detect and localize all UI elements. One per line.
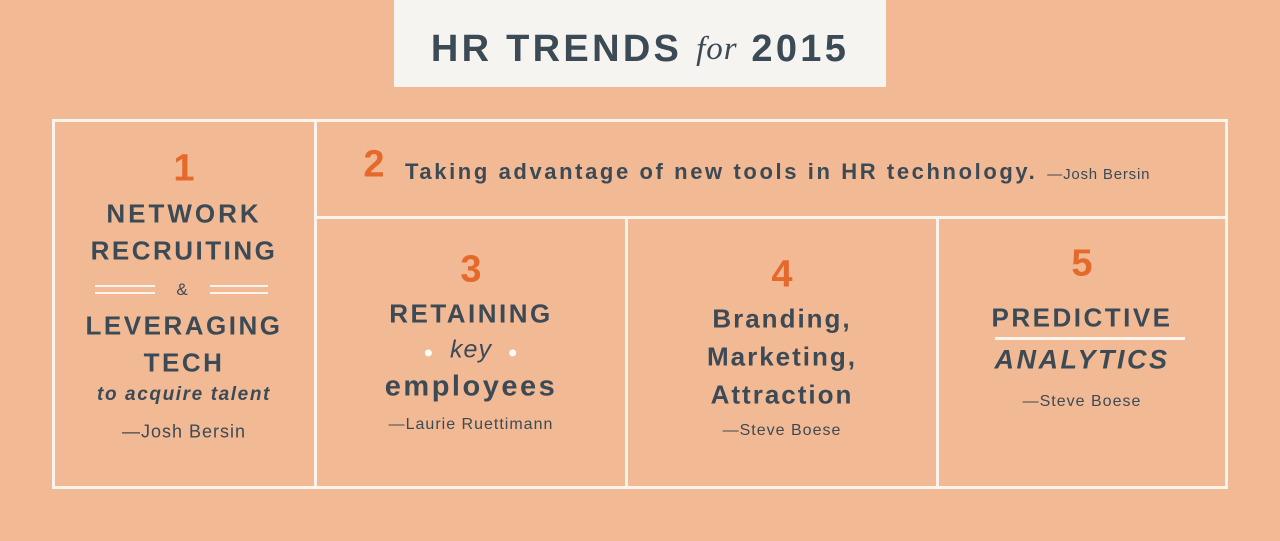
panel 4: Attraction <box>711 380 853 410</box>
title: for <box>696 31 738 67</box>
panel 5: 5 <box>1071 242 1093 284</box>
panel 2: 2 <box>363 144 385 186</box>
panel 4 <box>707 254 857 439</box>
panel 2 <box>363 144 1150 186</box>
panel 5: ANALYTICS <box>994 344 1170 374</box>
panel 3: employees <box>385 370 557 402</box>
panel 2: Taking advantage of new tools in HR technology. —Josh Bersin <box>405 159 1150 184</box>
panel 1: —Josh Bersin <box>122 422 246 442</box>
panel 4: —Steve Boese <box>723 422 841 439</box>
panel 4: 4 <box>771 254 793 296</box>
panel 4: Branding, <box>712 304 852 334</box>
panel 5: PREDICTIVE <box>991 302 1173 332</box>
panel 3: ● key ● <box>423 336 519 364</box>
panel 1: RECRUITING <box>91 236 277 266</box>
panel 5 <box>991 242 1185 410</box>
panel 4: Marketing, <box>707 342 857 372</box>
title <box>394 0 886 87</box>
panel 5: —Steve Boese <box>1023 393 1141 410</box>
panel 3 <box>385 248 557 433</box>
panel 3: RETAINING <box>389 298 553 328</box>
panel 1: TECH <box>144 348 224 378</box>
panel 1: NETWORK <box>106 198 262 228</box>
panel 1 <box>86 148 282 442</box>
panel 1: & <box>176 280 188 299</box>
title: HR TRENDS 2015 <box>431 28 849 70</box>
panel 1: to acquire talent <box>97 384 271 405</box>
panel 1: 1 <box>173 148 195 190</box>
panel 3: —Laurie Ruettimann <box>389 416 553 433</box>
panel 1: LEVERAGING <box>86 310 282 340</box>
panel 3: 3 <box>460 248 482 290</box>
